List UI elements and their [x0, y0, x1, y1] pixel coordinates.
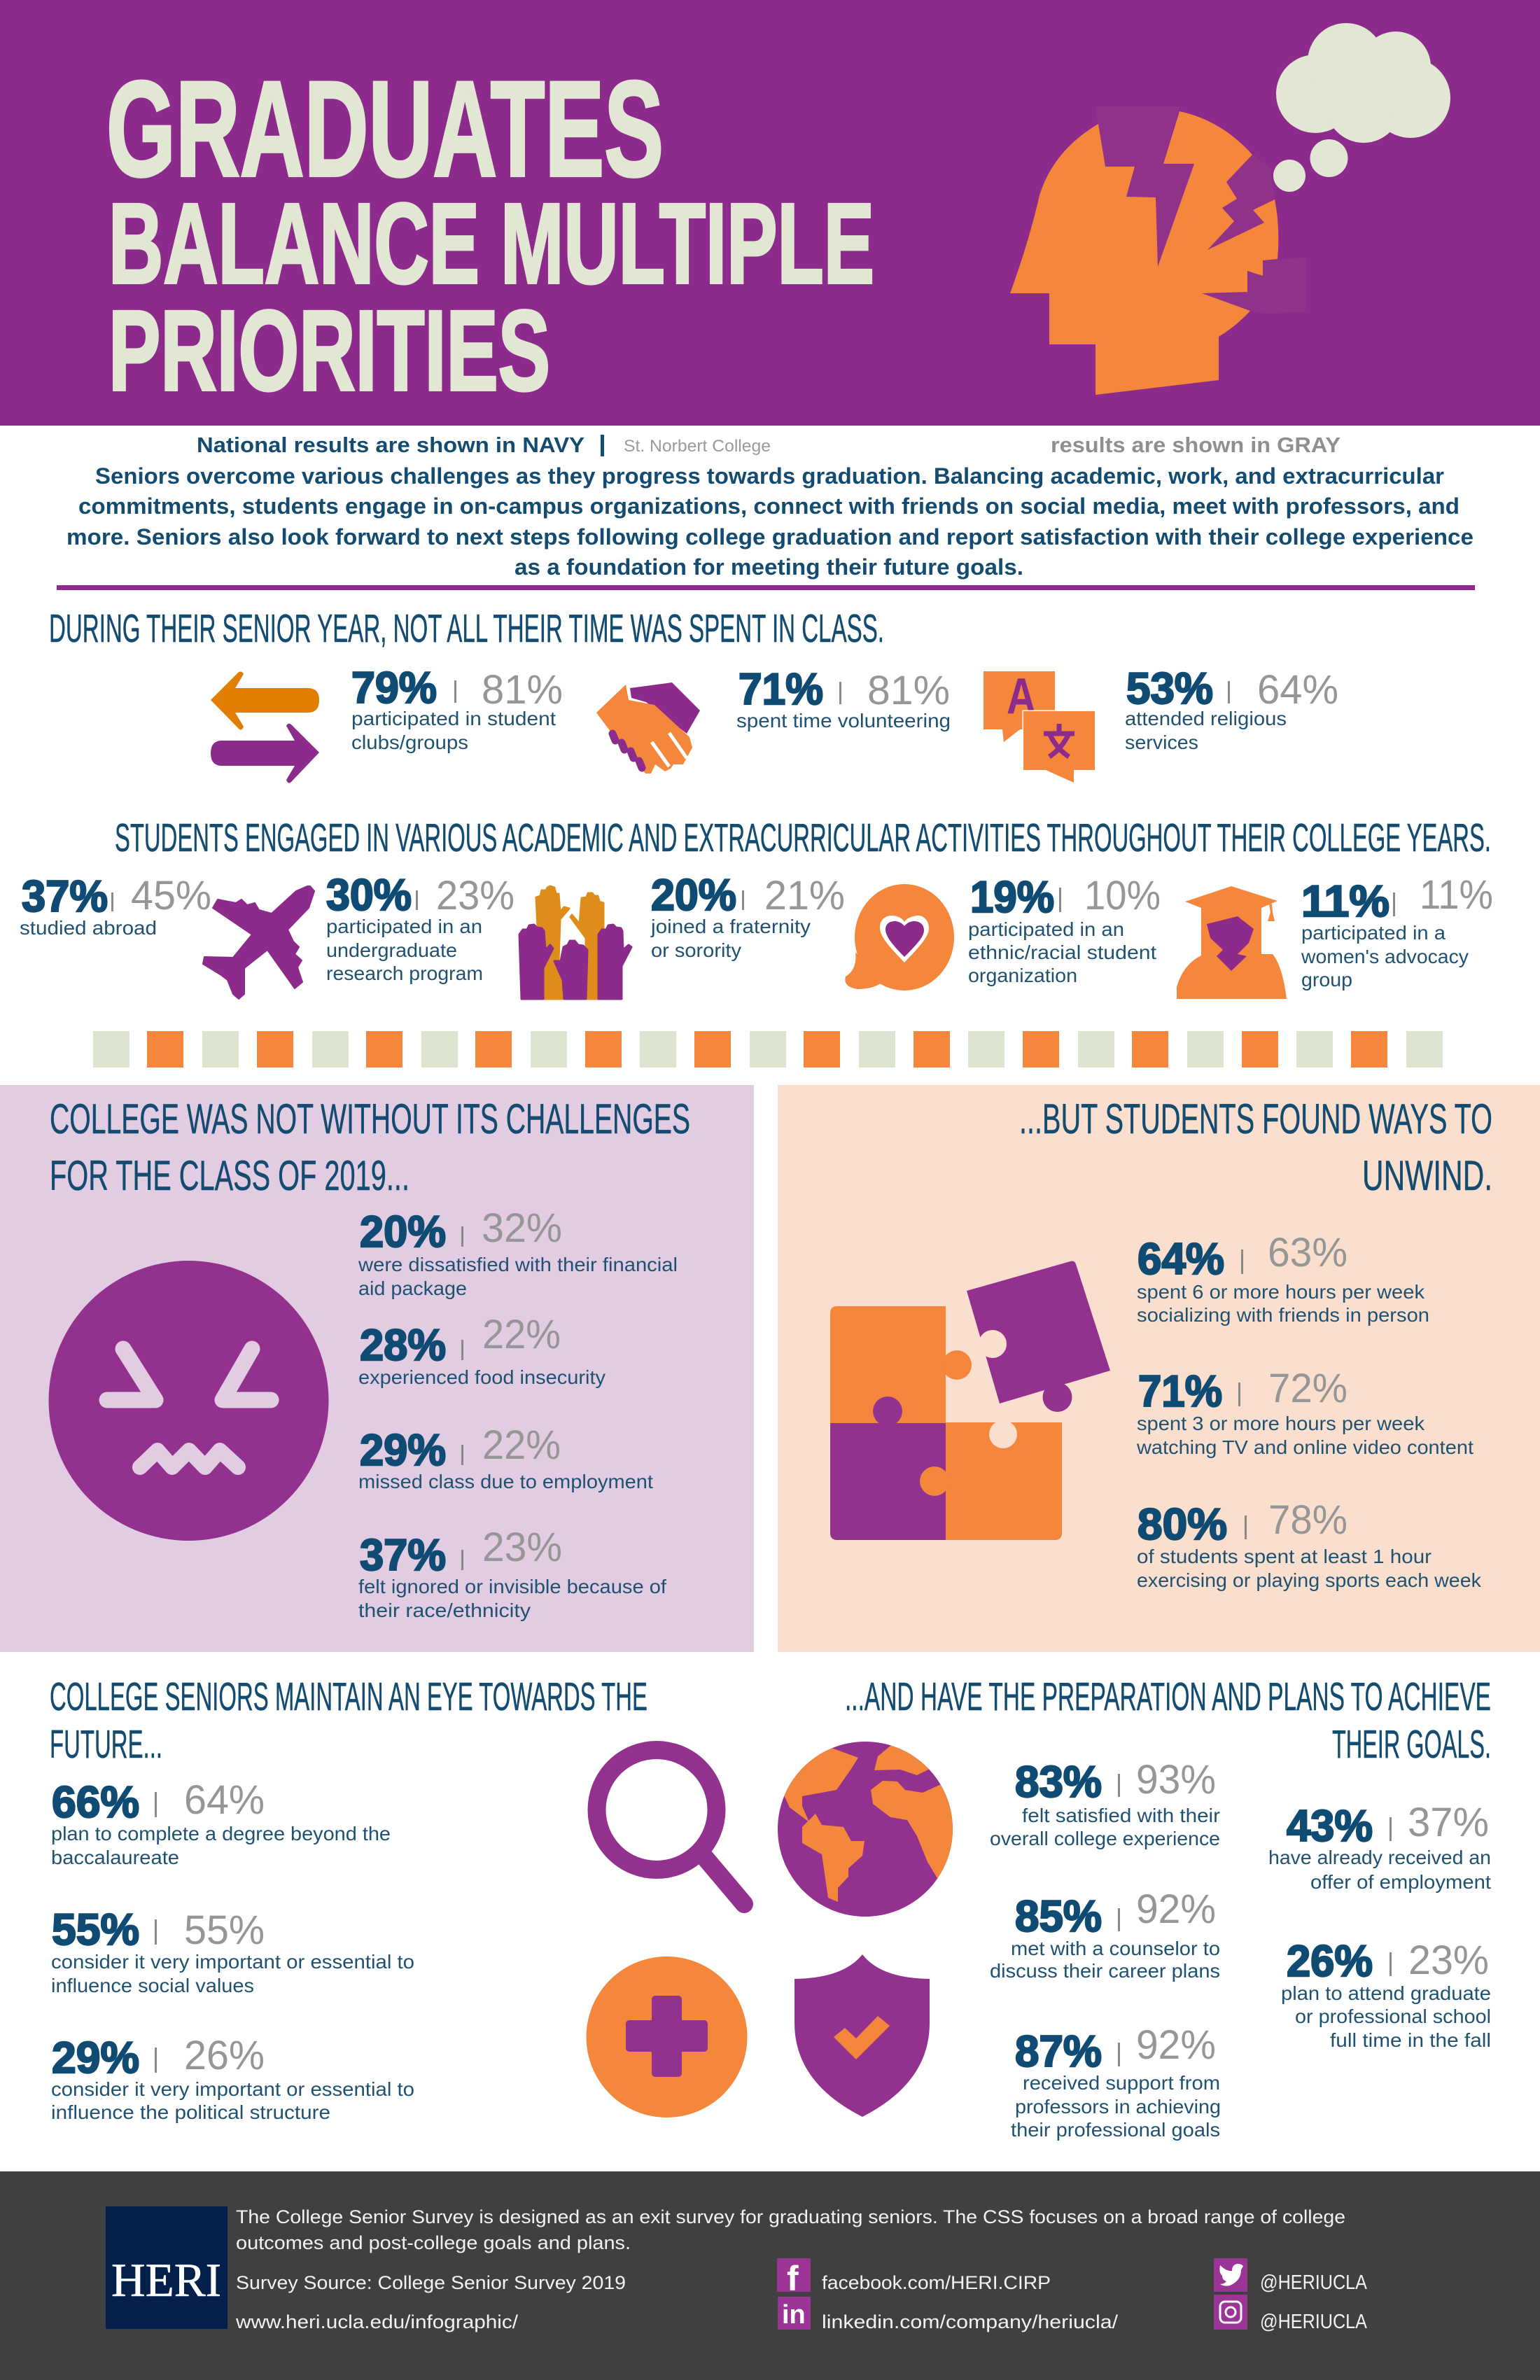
stat: financial aid: 20% [360, 1208, 446, 1256]
icon: raised hands [519, 886, 631, 999]
stat: volunteering [736, 665, 951, 732]
survey description: Survey Source: College Senior Survey 2019 [236, 2272, 626, 2293]
stat: political structure: 29% [52, 2033, 139, 2082]
heading: preparation and plans [845, 1674, 1491, 1767]
stat: studied abroad [20, 872, 211, 939]
icon: twitter [1214, 2258, 1247, 2292]
icon: handshake [596, 682, 700, 774]
stat: fraternity or sorority [650, 871, 845, 961]
stat: ethnic or racial organization: 19% [970, 873, 1054, 922]
header banner [0, 0, 1540, 426]
stat: employment offer: offer of employment [1310, 1871, 1491, 1893]
stat: student clubs: 81% [482, 667, 563, 713]
icon: puzzle [830, 1261, 1110, 1540]
stat: employment offer [1268, 1800, 1491, 1893]
stat: women's advocacy: 11% [1420, 872, 1493, 918]
stat: religious services: services [1125, 732, 1198, 753]
stat: political structure: consider it very important or essential to [51, 2078, 414, 2100]
panel: challenges [0, 1085, 754, 1652]
icon: heart speech bubble [845, 884, 954, 990]
icon: airplane [203, 886, 314, 999]
stat: religious services: 64% [1257, 667, 1338, 713]
stat: social values: 55% [184, 1907, 265, 1953]
stat: missed class: 22% [482, 1422, 561, 1468]
logo: HERI: HERI [111, 2253, 221, 2306]
survey description: outcomes and post-college goals and plans. [236, 2232, 631, 2253]
stat: exercising: 78% [1268, 1497, 1348, 1543]
stat: ethnic or racial organization [968, 873, 1161, 986]
stat: financial aid [358, 1205, 678, 1299]
stat: missed class [358, 1422, 653, 1492]
stat: women's advocacy: 11% [1301, 877, 1390, 926]
stat: graduate school: full time in the fall [1330, 2029, 1491, 2051]
icon: facebook: f [787, 2259, 799, 2298]
stat: watching TV [1136, 1366, 1474, 1458]
icon: stressed face [49, 1261, 329, 1541]
icon: medical plus [587, 1956, 748, 2118]
heading: eye towards the future: COLLEGE SENIORS MAINTAIN AN EYE TOWARDS THE [50, 1674, 648, 1719]
stat: employment offer: have already received an [1268, 1847, 1491, 1868]
stat: student clubs: participated in student [351, 708, 556, 729]
stat: counselor: met with a counselor to [1011, 1938, 1220, 1959]
stat: degree beyond baccalaureate: plan to complete a degree beyond the [51, 1823, 391, 1844]
stat: missed class: missed class due to employment [358, 1471, 653, 1492]
stat: financial aid: 32% [482, 1205, 562, 1251]
intro paragraph [66, 463, 1474, 580]
stat: degree beyond baccalaureate [51, 1777, 391, 1868]
icon: linkedin: in [782, 2300, 806, 2330]
heading: challenges: COLLEGE WAS NOT WITHOUT ITS CHALLENGES [50, 1096, 690, 1142]
stat: political structure: 26% [184, 2033, 265, 2078]
icon: magnifying glass [596, 1750, 744, 1904]
stat: political structure: influence the political structure [51, 2101, 330, 2123]
stat: social values: influence social values [51, 1975, 254, 1996]
stat: graduate school: or professional school [1295, 2005, 1491, 2027]
stat: undergraduate research: research program [326, 962, 483, 984]
stat: socializing: 64% [1138, 1235, 1224, 1284]
intro paragraph: commitments, students engage in on-campus organizations, connect with friends on social media, meet with professors, and [78, 493, 1460, 519]
stat: ethnic or racial organization: participated in an [968, 918, 1124, 940]
heading: challenges [50, 1096, 690, 1199]
panel: unwinding [778, 1085, 1540, 1652]
stat: watching TV: spent 3 or more hours per week [1137, 1413, 1425, 1434]
stat: watching TV: 71% [1138, 1367, 1222, 1416]
stat: counselor: 92% [1136, 1886, 1216, 1932]
stat: student clubs [351, 664, 563, 753]
footer: @HERIUCLA [1260, 2311, 1368, 2333]
stat: women's advocacy [1301, 872, 1493, 990]
heading: eye towards the future [50, 1674, 648, 1767]
stat: fraternity or sorority: 21% [764, 873, 845, 918]
footer [0, 2171, 1540, 2380]
title: GRADUATES [106, 53, 664, 205]
stat: professor support: received support from [1023, 2072, 1220, 2094]
stat: degree beyond baccalaureate: 66% [52, 1778, 139, 1827]
footer: @HERIUCLA [1260, 2272, 1368, 2294]
stat: food insecurity: experienced food insecurity [358, 1366, 606, 1388]
footer: linkedin.com/company/heriucla/ [822, 2311, 1119, 2332]
survey description [235, 2206, 1345, 2332]
footer: facebook.com/HERI.CIRP [822, 2272, 1051, 2293]
legend line [197, 433, 1340, 457]
stat: social values: 55% [52, 1905, 139, 1954]
stat: women's advocacy: women's advocacy [1301, 946, 1469, 967]
title: BALANCE MULTIPLE [108, 179, 874, 307]
stat: social values: consider it very important or essential to [51, 1951, 414, 1973]
stat: religious services: 53% [1126, 664, 1213, 713]
stat: financial aid: aid package [358, 1278, 467, 1299]
stat: satisfied: overall college experience [990, 1828, 1220, 1849]
stat: exercising: of students spent at least 1 hour [1137, 1546, 1432, 1567]
icon: instagram [1214, 2295, 1247, 2330]
stat: graduate school [1281, 1937, 1491, 2051]
heading: unwind [1019, 1096, 1492, 1199]
stat: religious services: attended religious [1125, 708, 1287, 729]
stat: ethnic or racial organization: ethnic/racial student [968, 941, 1156, 963]
title [106, 53, 874, 414]
stat: satisfied [990, 1757, 1220, 1849]
heading: challenges: FOR THE CLASS OF 2019... [50, 1152, 410, 1199]
stat: student clubs: clubs/groups [351, 732, 468, 753]
stat: felt ignored [358, 1525, 666, 1621]
legend line: results are shown in GRAY [1051, 433, 1340, 457]
stat: social values [51, 1905, 414, 1996]
stat: professor support [1011, 2022, 1221, 2141]
legend line: St. Norbert College [624, 437, 771, 456]
stat: professor support: professors in achieving [1015, 2096, 1221, 2118]
stat: professor support: 87% [1015, 2027, 1102, 2076]
stat: counselor: 85% [1015, 1892, 1102, 1941]
stat: undergraduate research: 23% [436, 873, 514, 918]
stat: volunteering: 71% [738, 665, 823, 714]
heading: senior year: DURING THEIR SENIOR YEAR, NOT ALL THEIR TIME WAS SPENT IN CLASS. [49, 606, 884, 651]
stat: undergraduate research: 30% [326, 871, 412, 920]
stat: employment offer: 43% [1287, 1802, 1373, 1851]
logo: HERI [106, 2206, 227, 2329]
stat: undergraduate research [326, 871, 514, 984]
title: PRIORITIES [108, 286, 550, 414]
icon: graduate [1177, 886, 1287, 999]
stat: counselor: discuss their career plans [990, 1960, 1220, 1982]
stat: fraternity or sorority: joined a fraternity [650, 916, 811, 937]
stat: satisfied: 83% [1015, 1758, 1102, 1807]
stat: food insecurity: 28% [360, 1321, 446, 1370]
intro paragraph: as a foundation for meeting their future goals. [514, 554, 1023, 580]
stat: satisfied: felt satisfied with their [1022, 1805, 1220, 1826]
icon: linkedin [778, 2297, 811, 2330]
stat: professor support: their professional goals [1011, 2119, 1220, 2141]
icon: facebook [777, 2258, 811, 2298]
stat: felt ignored: 23% [482, 1525, 562, 1570]
stat: socializing: socializing with friends in person [1137, 1304, 1429, 1326]
stat: employment offer: 37% [1408, 1800, 1489, 1845]
stat: studied abroad: 45% [131, 873, 211, 918]
stat: exercising: exercising or playing sports each week [1137, 1569, 1482, 1591]
stat: exercising [1137, 1497, 1482, 1591]
icon: speech bubbles: A [1007, 668, 1036, 724]
stat: fraternity or sorority: or sorority [651, 939, 741, 961]
stat: satisfied: 93% [1136, 1757, 1216, 1802]
stat: financial aid: were dissatisfied with their financial [358, 1254, 678, 1275]
legend line: National results are shown in NAVY [197, 433, 584, 457]
stat: degree beyond baccalaureate: baccalaureate [51, 1847, 179, 1868]
intro paragraph: Seniors overcome various challenges as they progress towards graduation. Balancing academic, work, and extracurricular [95, 463, 1444, 489]
stat: studied abroad: studied abroad [20, 917, 157, 939]
stat: ethnic or racial organization: 10% [1084, 873, 1161, 918]
stat: graduate school: plan to attend graduate [1281, 1982, 1491, 2004]
icon: shield with check [794, 1954, 930, 2117]
stat: degree beyond baccalaureate: 64% [184, 1777, 265, 1823]
stat: watching TV: watching TV and online video content [1136, 1436, 1474, 1458]
stat: food insecurity [358, 1312, 606, 1388]
intro paragraph: more. Seniors also look forward to next steps following college graduation and report satisfaction with their college experience [66, 524, 1474, 550]
survey description: The College Senior Survey is designed as an exit survey for graduating seniors. The CSS focuses on a broad range of college [236, 2206, 1345, 2227]
stat: political structure [51, 2033, 414, 2123]
icon: speech bubbles [983, 668, 1095, 783]
stat: fraternity or sorority: 20% [651, 871, 736, 920]
icon: head with lightning bolts [1010, 106, 1306, 395]
stat: ethnic or racial organization: organization [968, 965, 1077, 986]
survey description: www.heri.ucla.edu/infographic/ [235, 2311, 519, 2332]
stat: volunteering: 81% [867, 668, 950, 713]
stat: graduate school: 23% [1408, 1938, 1489, 1983]
stat: socializing: 63% [1268, 1230, 1348, 1275]
stat: socializing: spent 6 or more hours per week [1137, 1281, 1425, 1303]
stat: felt ignored: felt ignored or invisible because of [358, 1576, 666, 1597]
stat: counselor [990, 1886, 1220, 1982]
stat: religious services [1125, 664, 1338, 753]
stat: volunteering: spent time volunteering [736, 710, 951, 732]
stat: professor support: 92% [1136, 2022, 1216, 2068]
stat: women's advocacy: group [1301, 969, 1352, 990]
icon: exchange arrows [211, 671, 319, 783]
stat: graduate school: 26% [1287, 1937, 1373, 1986]
stat: missed class: 29% [360, 1426, 446, 1475]
icon: globe [778, 1742, 953, 1917]
stat: women's advocacy: participated in a [1301, 922, 1446, 944]
stat: studied abroad: 37% [22, 872, 108, 921]
stat: student clubs: 79% [351, 664, 437, 713]
stat: undergraduate research: undergraduate [326, 939, 457, 961]
stat: socializing [1137, 1230, 1429, 1326]
stat: felt ignored: 37% [360, 1531, 446, 1580]
stat: undergraduate research: participated in an [326, 916, 482, 937]
heading: eye towards the future: FUTURE... [50, 1722, 162, 1767]
stat: exercising: 80% [1138, 1500, 1227, 1549]
stat: food insecurity: 22% [482, 1312, 561, 1357]
stat: watching TV: 72% [1268, 1366, 1348, 1411]
stat: felt ignored: their race/ethnicity [358, 1600, 531, 1621]
icon: thought cloud [1273, 23, 1450, 192]
